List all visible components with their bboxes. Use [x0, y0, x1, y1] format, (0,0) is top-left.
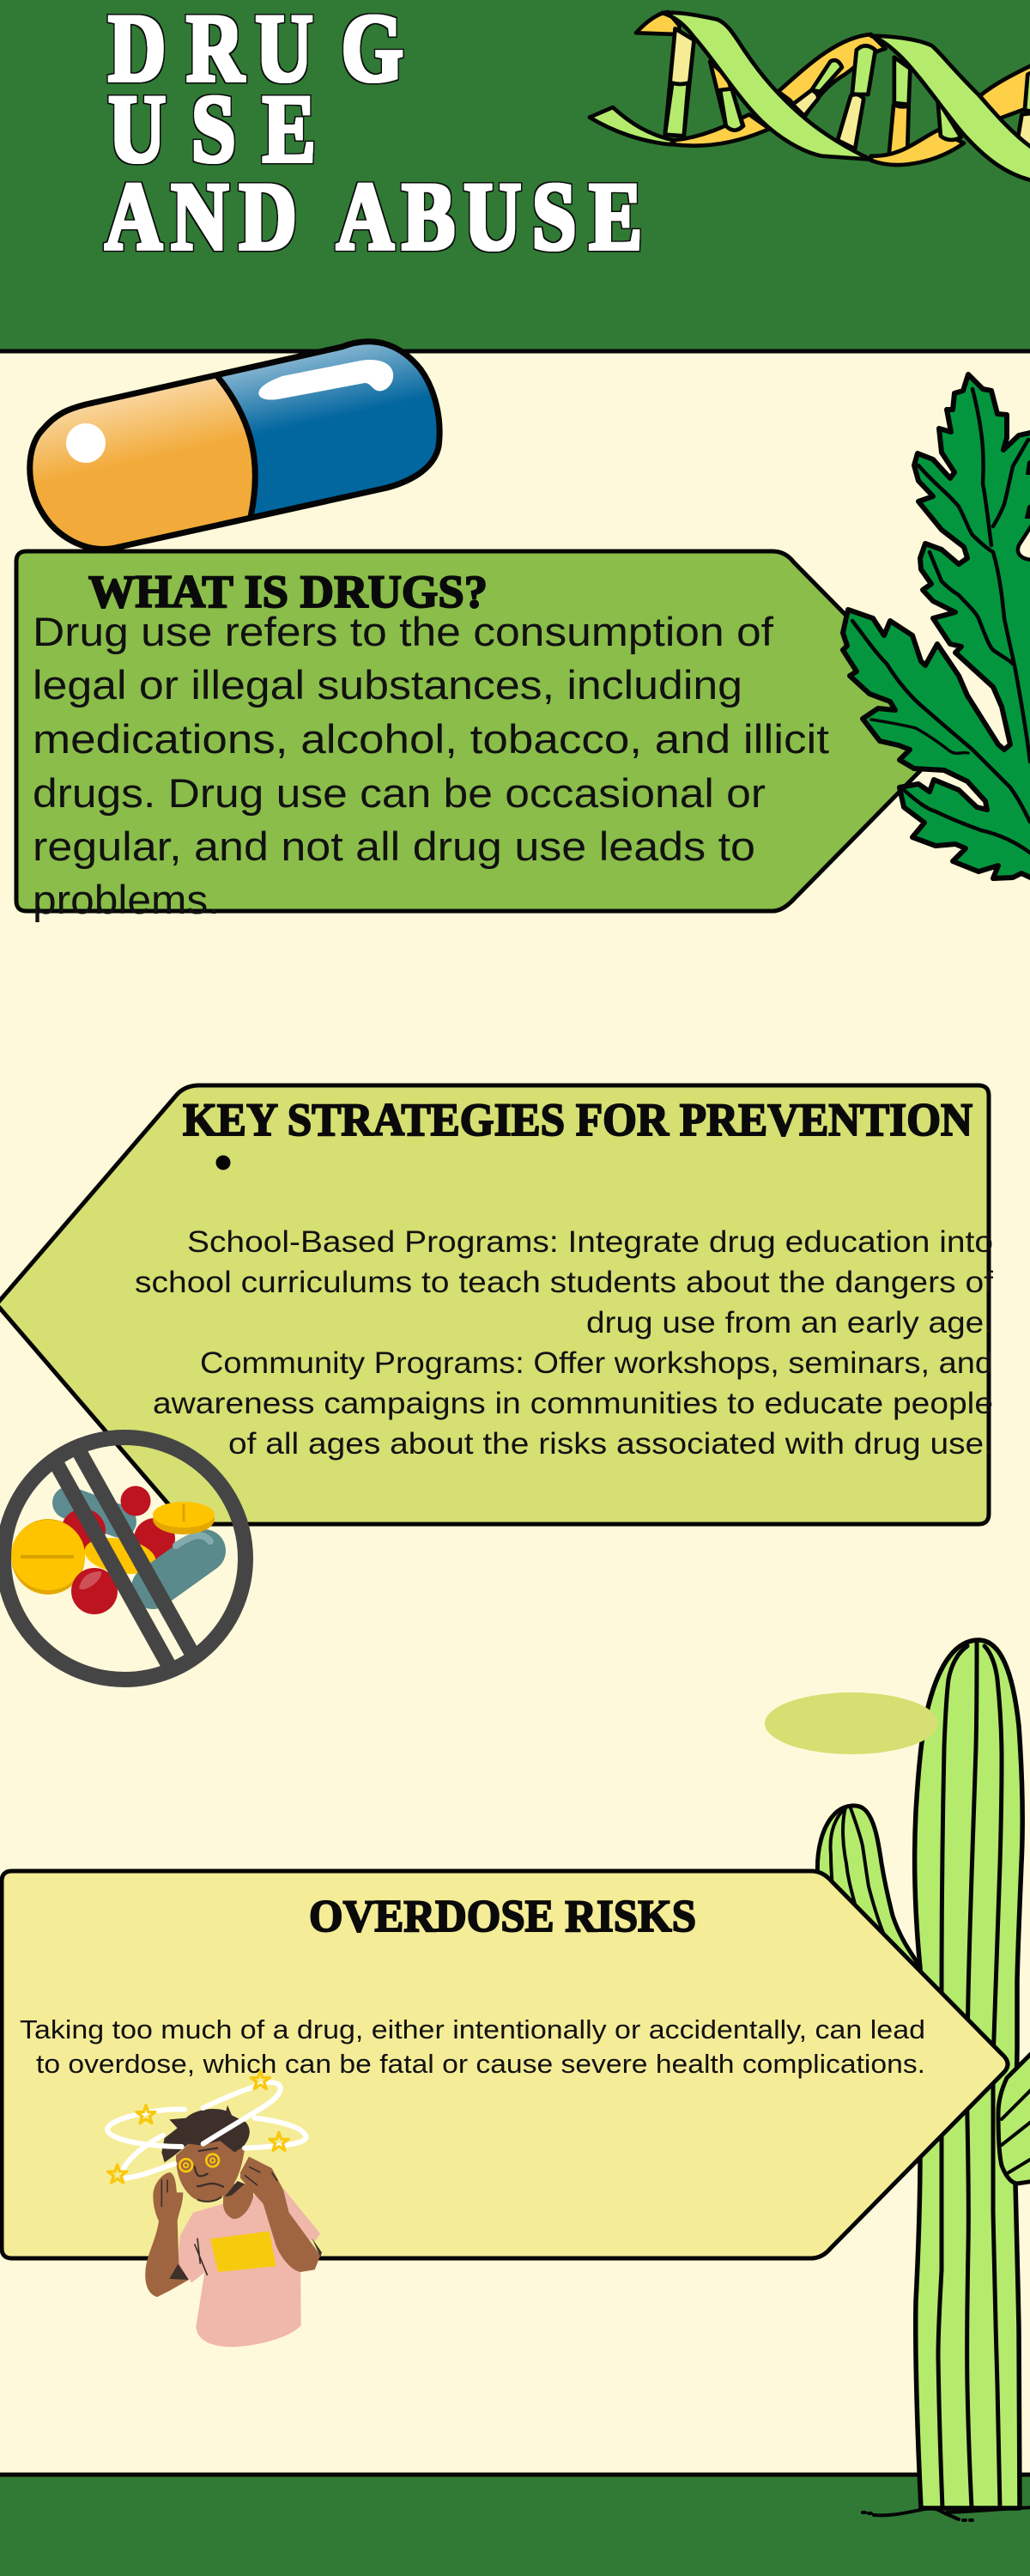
icon: capsule pill: [30, 342, 439, 549]
text block: strategies: drug use from an early age.: [586, 1306, 993, 1340]
text block: strategies: School-Based Programs: Integrate drug education into: [187, 1225, 993, 1259]
bullet: [216, 1156, 230, 1170]
text block: definition: problems.: [33, 877, 220, 922]
text block: overdose: to overdose, which can be fatal or cause severe health complications.: [36, 2049, 925, 2079]
text block: overdose: Taking too much of a drug, either intentionally or accidentally, can lead: [20, 2014, 925, 2044]
icon: dizzy person: [107, 2071, 322, 2347]
text block: definition: Drug use refers to the consumption of: [33, 609, 774, 654]
title: USE: [108, 76, 316, 183]
text block: strategies: awareness campaigns in communities to educate people: [153, 1387, 993, 1420]
panel: key strategies for prevention: [0, 1085, 993, 1524]
panel: what is drugs: [16, 551, 960, 922]
text block: strategies: of all ages about the risks associated with drug use.: [228, 1427, 993, 1461]
text block: overdose: [20, 2014, 925, 2079]
heading: what is drugs: WHAT IS DRUGS?: [88, 566, 488, 617]
text block: strategies: Community Programs: Offer workshops, seminars, and: [200, 1346, 993, 1380]
footer band: [0, 2475, 1030, 2576]
icon: no drugs sign: [3, 1437, 245, 1680]
text block: definition: drugs. Drug use can be occasional or: [33, 770, 766, 816]
icon: cactus: [817, 1640, 1030, 2520]
icon: green leaf: [843, 374, 1030, 879]
header band: [0, 0, 1030, 351]
title: [105, 0, 642, 270]
text block: definition: [33, 609, 829, 922]
text block: strategies: [135, 1225, 993, 1461]
title: AND ABUSE: [105, 163, 642, 270]
icon: DNA helix: [590, 12, 1030, 181]
panel: overdose risks: [2, 1871, 1008, 2258]
text block: strategies: school curriculums to teach students about the dangers of: [135, 1266, 993, 1299]
text block: definition: legal or illegal substances, including: [33, 662, 742, 708]
heading: key strategies: KEY STRATEGIES FOR PREVENTION: [183, 1094, 972, 1145]
heading: overdose risks: OVERDOSE RISKS: [309, 1892, 696, 1941]
text block: definition: regular, and not all drug use leads to: [33, 823, 755, 869]
decorative oval: [765, 1692, 938, 1754]
text block: definition: medications, alcohol, tobacco, and illicit: [33, 716, 829, 762]
